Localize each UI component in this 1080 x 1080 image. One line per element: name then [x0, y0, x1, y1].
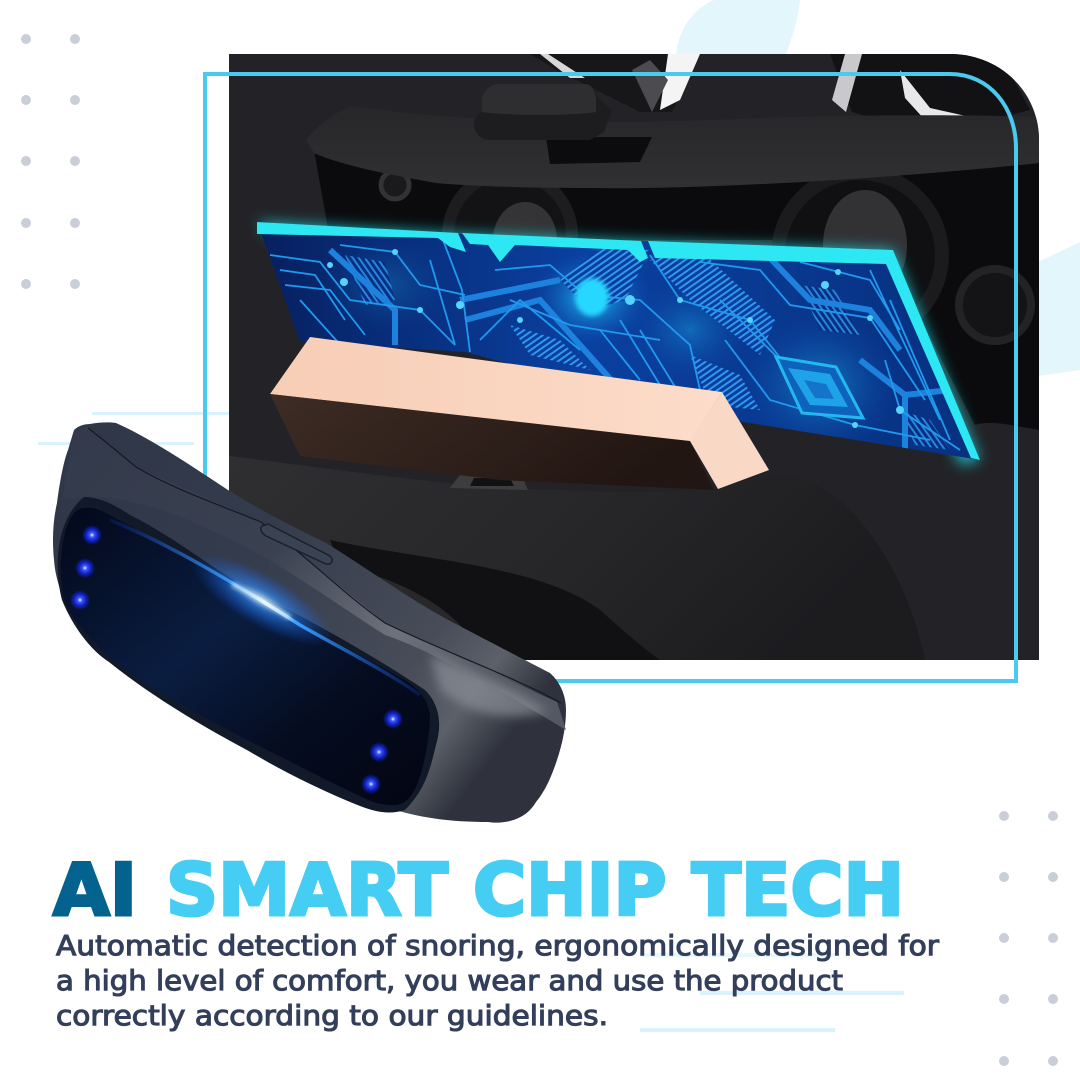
headband [310, 115, 1039, 188]
glowing cyan top edge [257, 222, 980, 460]
body text: a high level of comfort, you wear and use the product [56, 965, 843, 997]
title: AI [53, 848, 137, 930]
screen bezel [58, 497, 439, 813]
dark interior under headband [314, 150, 1039, 430]
body text: Automatic detection of snoring, ergonomically designed for [56, 930, 940, 962]
board glow [257, 222, 980, 465]
fine traces [270, 240, 960, 450]
metal clips [530, 54, 677, 112]
seam line [88, 428, 561, 703]
blue outline frame [205, 74, 1016, 681]
board surface [257, 222, 980, 460]
wide traces [330, 250, 950, 450]
glowing streak [180, 537, 344, 663]
body text: correctly according to our guidelines. [56, 1000, 608, 1032]
dot grid: top left [21, 34, 80, 289]
round sockets [442, 185, 578, 238]
clip block [546, 137, 652, 164]
device with blue lights [53, 422, 566, 823]
button [261, 524, 332, 564]
top face [62, 427, 566, 730]
screen glass [61, 508, 430, 805]
dot grid: bottom right [999, 811, 1058, 1066]
metal highlight [430, 655, 548, 716]
device body [53, 422, 566, 823]
circuit board [257, 222, 980, 465]
dark product photo panel [229, 54, 1039, 660]
body text [55, 930, 940, 1032]
hatch blocks [560, 248, 650, 310]
status lights [70, 525, 403, 794]
microchip [776, 357, 863, 418]
thermal pad block [270, 337, 769, 490]
title: SMART CHIP TECH [166, 848, 904, 930]
lower housing [229, 456, 405, 546]
